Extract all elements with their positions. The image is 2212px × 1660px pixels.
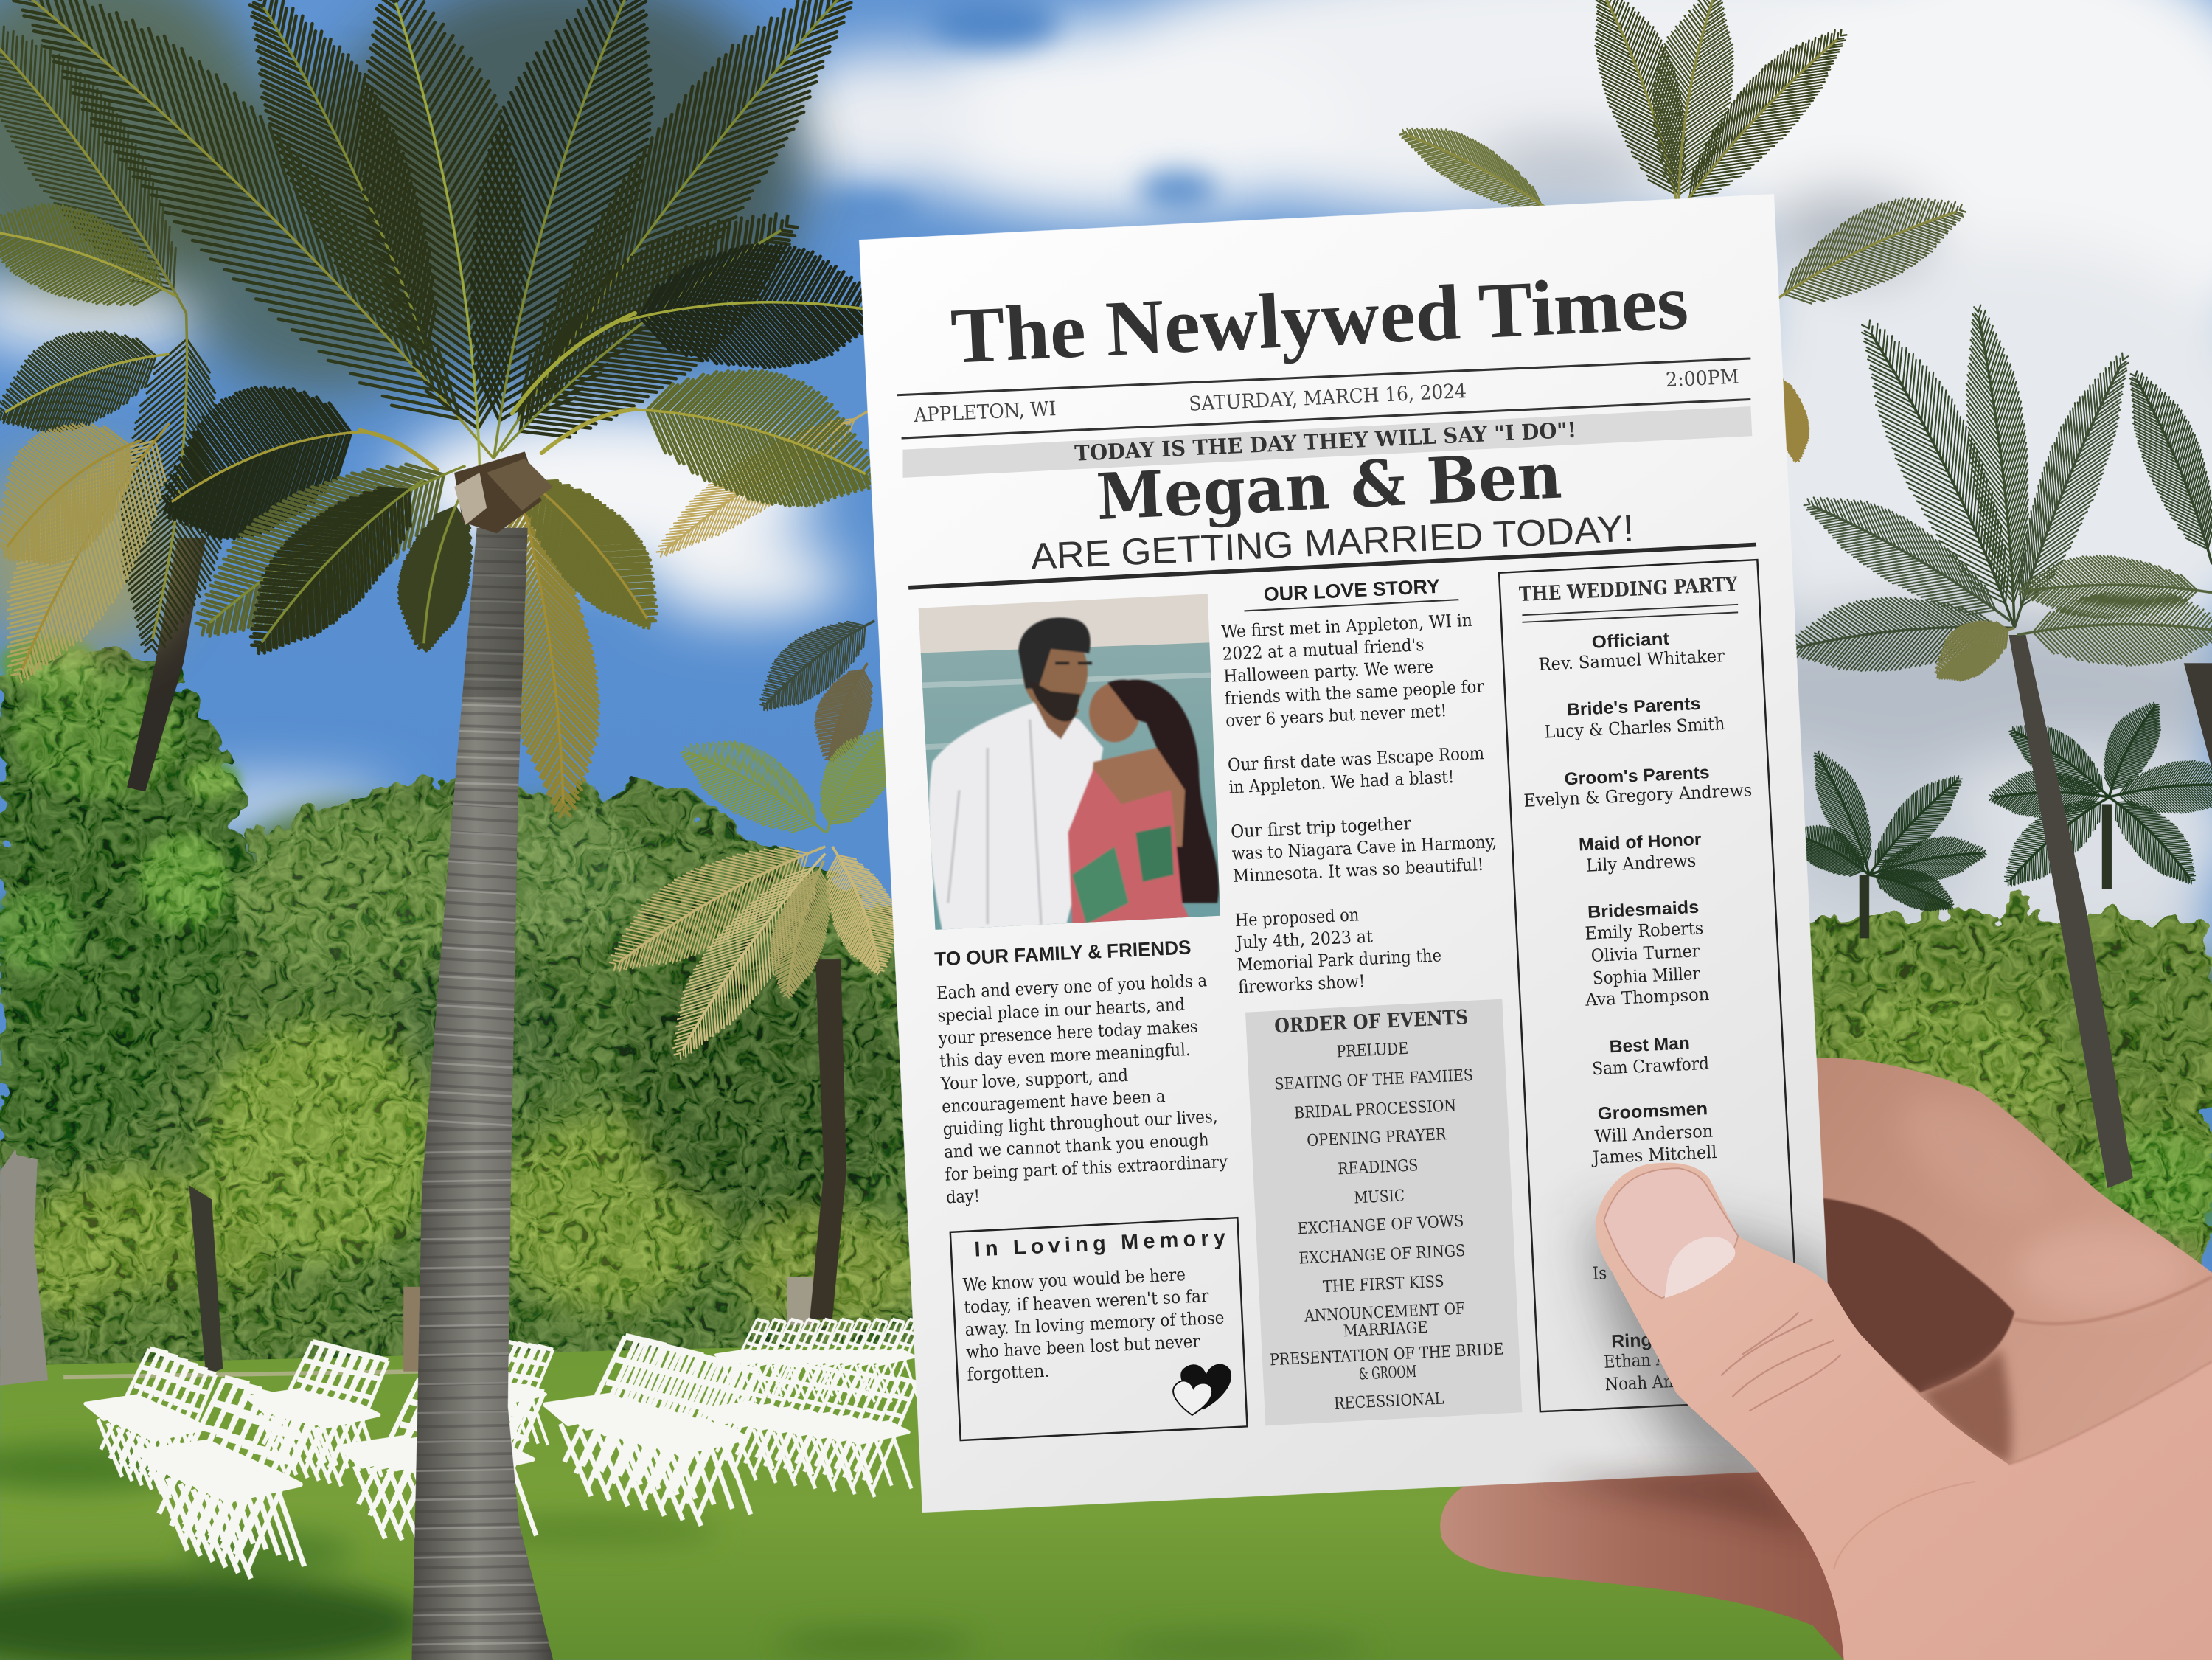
panel: the wedding party: Sophia Miller: [1593, 963, 1701, 989]
section: to our family and friends: your presence here today makes: [937, 1016, 1198, 1049]
panel: order of events: PRELUDE: [1336, 1040, 1409, 1061]
section: our love story: He proposed on: [1234, 904, 1360, 931]
section: our love story: Halloween party. We were: [1223, 656, 1434, 687]
palm: middle small: [589, 394, 922, 1319]
dateline band: APPLETON, WI: [913, 397, 1057, 427]
panel: in loving memory: who have been lost but never: [965, 1330, 1201, 1362]
headline: getting married: ARE GETTING MARRIED TODAY!: [1029, 507, 1635, 577]
hand: fingers behind the card: [1440, 1051, 2212, 1660]
section: to our family and friends: Each and every one of you holds a: [936, 970, 1208, 1004]
section: to our family and friends: this day even more meaningful.: [939, 1039, 1191, 1072]
panel: order of events: OPENING PRAYER: [1307, 1125, 1447, 1150]
panel: the wedding party: Ava Thompson: [1584, 984, 1710, 1010]
section: our love story: over 6 years but never met!: [1225, 700, 1447, 731]
panel: the wedding party: Will Anderson: [1594, 1120, 1714, 1147]
dateline band: [897, 358, 1750, 438]
icon: thumbnail: [1604, 1168, 1738, 1298]
section: our love story: We first met in Appleton, WI in: [1221, 610, 1473, 642]
background: forest band: [0, 782, 2212, 1425]
panel: the wedding party: THE WEDDING PARTY: [1518, 573, 1739, 606]
section: our love story: fireworks show!: [1238, 970, 1366, 997]
distant palms right: [1783, 694, 2212, 938]
section: to our family and friends: guiding light throughout our lives,: [942, 1106, 1218, 1139]
section: our love story: July 4th, 2023 at: [1234, 925, 1374, 953]
panel: order of events: PRESENTATION OF THE BRIDE: [1270, 1340, 1504, 1369]
panel: order of events: MARRIAGE: [1343, 1319, 1428, 1341]
panel: the wedding party: Evelyn & Gregory Andrews: [1523, 779, 1753, 811]
panel: the wedding party: Groomsmen: [1597, 1099, 1708, 1124]
hand: thumb and palm in front of the card: [1537, 1163, 2212, 1660]
panel: the wedding party: Lucy & Charles Smith: [1544, 713, 1725, 743]
panel: order of events: EXCHANGE OF RINGS: [1298, 1242, 1466, 1268]
panel: the wedding party: Maid of Honor: [1578, 830, 1702, 855]
section: to our family and friends: encouragement have been a: [942, 1086, 1166, 1116]
panel: in loving memory: forgotten.: [967, 1361, 1050, 1385]
section: our love story: Memorial Park during the: [1237, 945, 1442, 975]
section: to our family and friends: Your love, support, and: [939, 1065, 1129, 1094]
panel: the wedding party: [1499, 560, 1801, 1411]
masthead title: The Newlywed Times: [949, 259, 1690, 381]
palm: right with trunk: [1784, 301, 2212, 1188]
panel: the wedding party: Ring Bearers: [1611, 1326, 1726, 1352]
section: to our family and friends: and we cannot thank you enough: [944, 1129, 1210, 1162]
section: our love story: OUR LOVE STORY: [1263, 575, 1441, 605]
section: our love story: friends with the same people for: [1224, 676, 1485, 709]
section: our love story: was to Niagara Cave in Harmony,: [1231, 831, 1498, 864]
panel: order of events: SEATING OF THE FAMIIES: [1274, 1066, 1474, 1094]
newspaper card: [859, 194, 1863, 1513]
panel: the wedding party: Ethan Andrews: [1603, 1346, 1725, 1372]
icon: two hearts: [1173, 1364, 1231, 1415]
re-draw of main trunk over chairs: [412, 805, 553, 1660]
posts: [403, 1277, 813, 1372]
panel: in loving memory: [950, 1218, 1248, 1440]
panel: order of events: ANNOUNCEMENT OF: [1304, 1300, 1466, 1326]
section: our love story: 2022 at a mutual friend's: [1222, 634, 1425, 664]
panel: the wedding party: Officiant: [1591, 629, 1670, 653]
panel: in loving memory: today, if heaven weren't so far: [964, 1285, 1210, 1318]
panel: the wedding party: Olivia Turner: [1590, 940, 1701, 966]
panel: the wedding party: Emily Roberts: [1585, 917, 1704, 944]
panel: in loving memory: We know you would be here: [962, 1264, 1186, 1295]
panel: order of events: MUSIC: [1354, 1187, 1405, 1208]
grass lawn: [0, 1343, 2212, 1660]
section: our love story: Minnesota. It was so beautiful!: [1232, 854, 1484, 886]
headline: couple names: Megan & Ben: [1095, 438, 1563, 535]
panel: in loving memory: away. In loving memory of those: [964, 1307, 1225, 1340]
section: to our family and friends: [934, 936, 1229, 1208]
white folding chairs: [86, 1319, 921, 1579]
panel: the wedding party: Best Man: [1609, 1033, 1690, 1057]
panel: the wedding party: Noah Andrews: [1604, 1369, 1722, 1395]
section: our love story: Our first date was Escape Room: [1227, 743, 1485, 775]
palm: far left with trunk: [0, 0, 268, 791]
panel: order of events: ORDER OF EVENTS: [1274, 1006, 1469, 1038]
panel: the wedding party: James Mitchell: [1590, 1142, 1717, 1168]
panel: the wedding party: Rev. Samuel Whitaker: [1538, 645, 1725, 675]
grey sub-headline strip: TODAY IS THE DAY THEY WILL SAY "I DO"!: [1074, 417, 1577, 466]
section: our love story: in Appleton. We had a blast!: [1228, 766, 1455, 798]
section: our love story: Our first trip together: [1231, 813, 1412, 842]
panel: order of events: THE FIRST KISS: [1322, 1273, 1444, 1296]
panel: the wedding party: Groom's Parents: [1564, 763, 1710, 789]
panel: the wedding party: Bride's Parents: [1566, 694, 1701, 720]
section: to our family and friends: day!: [945, 1185, 981, 1208]
panel: the wedding party: Sam Crawford: [1592, 1053, 1710, 1079]
panel: the wedding party: Lily Andrews: [1585, 850, 1697, 876]
panel: the wedding party: Is: [1592, 1263, 1607, 1284]
section: to our family and friends: special place in our hearts, and: [937, 994, 1186, 1026]
panel: order of events: & GROOM: [1358, 1363, 1417, 1384]
panel: order of events: RECESSIONAL: [1334, 1390, 1444, 1414]
couple photo: [902, 586, 1234, 938]
panel: order of events: [1245, 999, 1522, 1425]
panel: order of events: BRIDAL PROCESSION: [1294, 1097, 1457, 1123]
panel: order of events: EXCHANGE OF VOWS: [1297, 1212, 1464, 1238]
dateline band: SATURDAY, MARCH 16, 2024: [1189, 380, 1467, 416]
section: our love story: [1220, 575, 1503, 998]
panel: order of events: READINGS: [1338, 1156, 1419, 1178]
palm: top centre behind paper: [1394, 0, 1975, 465]
panel: the wedding party: Bridesmaids: [1587, 897, 1700, 923]
section: to our family and friends: for being part of this extraordinary: [945, 1151, 1228, 1185]
grey sub-headline strip: [902, 406, 1752, 478]
dateline band: 2:00PM: [1665, 366, 1739, 392]
palm: main big trunk and crown: [0, 0, 892, 1660]
section: to our family and friends: TO OUR FAMILY & FRIENDS: [934, 936, 1192, 970]
panel: in loving memory: In Loving Memory: [974, 1226, 1226, 1262]
thumb shadow on card: [1593, 1213, 1863, 1482]
left foreground tree: [0, 635, 245, 1386]
